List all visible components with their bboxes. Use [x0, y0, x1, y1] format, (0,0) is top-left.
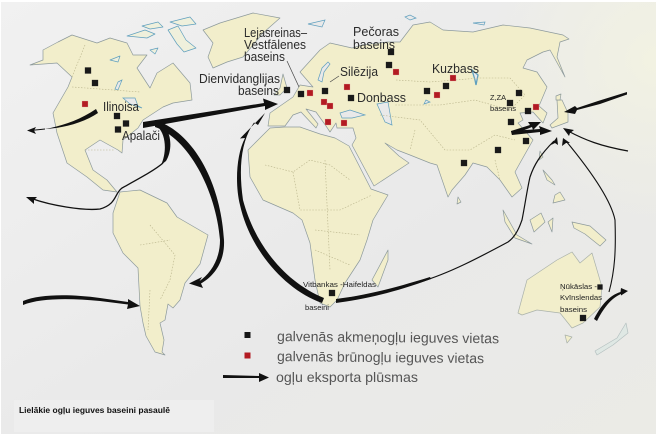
label: Lejasreinas-Vestfalenes: Lejasreinas– — [244, 26, 307, 40]
land: New Zealand — [595, 323, 628, 355]
label: Nukaslas-Kvinslendas: baseins — [560, 305, 587, 314]
label: Pecoras: Pečoras — [353, 25, 399, 39]
national borders — [72, 45, 525, 330]
export flow arrows — [23, 92, 628, 321]
label: Nukaslas-Kvinslendas: Ņūkāslas - — [560, 282, 598, 291]
land: Greenland — [203, 13, 280, 68]
label: Silezija: Silēzija — [340, 64, 379, 79]
leader lines — [287, 61, 339, 87]
label: Nukaslas-Kvinslendas — [560, 282, 602, 314]
land: Eurasia — [268, 22, 569, 197]
land: Sri Lanka, Hokkaido, Taiwan, Philippines — [457, 94, 565, 204]
arrow: Southern Africa to East Asia — [336, 137, 558, 303]
land: Madagascar — [372, 250, 388, 287]
arrow: China to Korea — [511, 122, 541, 135]
label: Ilinoisa: Ilinoisa — [103, 100, 139, 114]
label: Vitbankas-Haifeldas: Vitbankas -Haifeldas — [303, 280, 376, 289]
legend: black coal: galvenās akmeņogļu ieguves vietas — [277, 328, 499, 346]
label: Kuzbass: Kuzbass — [432, 61, 479, 76]
land: South America — [113, 190, 208, 355]
land: Japan — [550, 100, 568, 128]
brown coal markers — [82, 69, 539, 126]
label: Donbass: Donbass — [357, 90, 406, 105]
label: Nukaslas-Kvinslendas: Kvīnslendas — [560, 293, 602, 302]
legend: export flows: ogļu eksporta plūsmas — [276, 369, 418, 385]
land: British Isles — [274, 74, 287, 95]
land: Africa — [248, 127, 388, 307]
label: Z,ZA baseins: baseins — [490, 104, 516, 113]
label: Dienvidanglijas: baseins — [238, 84, 279, 98]
label: Z,ZA baseins — [490, 93, 516, 113]
arrow: Australia to Japan — [562, 138, 615, 292]
land: Tasmania — [565, 335, 572, 343]
arrow: Australia to Pacific — [594, 288, 628, 321]
label: Pecoras: baseins — [353, 38, 395, 52]
land: Indonesia and New Guinea — [503, 210, 606, 246]
land: North America — [30, 35, 192, 192]
land: Australia — [518, 252, 602, 328]
legend — [223, 328, 499, 385]
label: Vitbankas-Haifeldas — [303, 280, 376, 312]
arrow: Southern Africa to Europe — [237, 113, 324, 303]
arrow: China to Japan — [511, 126, 552, 135]
label: Vitbankas-Haifeldas: baseini — [305, 303, 329, 312]
inland seas and lakes — [115, 15, 485, 125]
caption: Lielākie ogļu ieguves baseini pasaulē — [19, 406, 171, 415]
arrow: Pacific to Japan north — [564, 92, 627, 114]
arrow: USA to South America east coast — [155, 120, 224, 288]
caption — [14, 400, 214, 432]
arrow: Pacific to Japan east — [563, 128, 628, 151]
black coal markers — [85, 49, 602, 321]
legend: brown coal: galvenās brūnogļu ieguves vietas — [277, 348, 484, 366]
arrow: Pacific to South America — [23, 295, 140, 309]
label: Z,ZA baseins: Z,ZA — [490, 93, 506, 102]
label: Apalaci: Apalači — [122, 129, 160, 143]
label: Dienvidanglijas: Dienvidanglijas — [199, 72, 280, 86]
arrow: North America west — [27, 109, 98, 134]
land: Canadian Arctic islands — [110, 17, 196, 62]
arrow: USA to Europe — [143, 98, 278, 128]
world map — [30, 13, 628, 355]
label: Lejasreinas-Vestfalenes: baseins — [244, 50, 285, 64]
place labels — [103, 25, 479, 143]
label: Pecoras — [353, 25, 399, 52]
label: Dienvidanglijas — [199, 72, 280, 98]
label: Lejasreinas-Vestfalenes — [244, 26, 307, 64]
arrow: USA to Pacific via Panama — [26, 122, 170, 209]
coal site markers — [82, 49, 602, 321]
label: Lejasreinas-Vestfalenes: Vestfālenes — [244, 38, 306, 52]
